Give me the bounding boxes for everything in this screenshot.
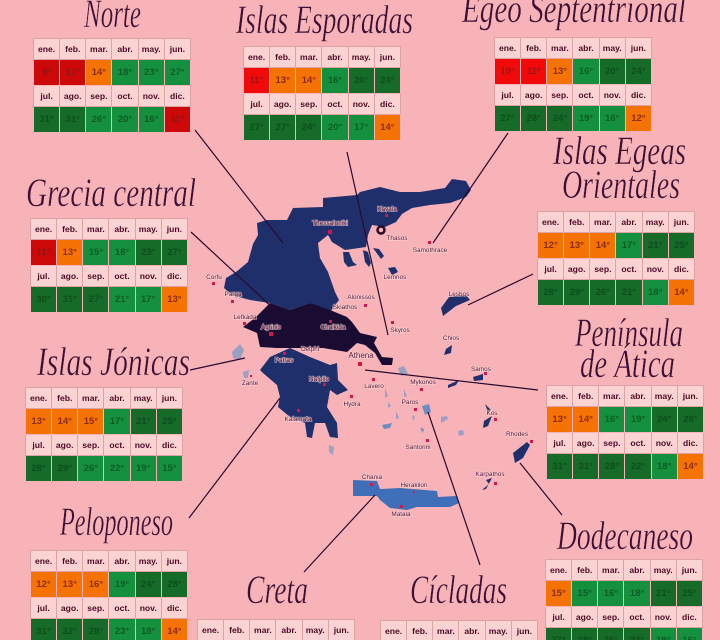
table: Egeo Septentrional bbox=[494, 37, 652, 131]
table: Peloponeso: 24° bbox=[141, 579, 155, 590]
table: Peloponeso: 28° bbox=[89, 626, 103, 637]
table: Islas Egeas Orientales: nov. bbox=[647, 264, 664, 274]
table: Islas Jónicas: 22° bbox=[110, 463, 124, 474]
place labels: Athena bbox=[348, 351, 374, 360]
table: Islas Egeas Orientales: 14° bbox=[674, 287, 689, 298]
table: Egeo Septentrional: 27° bbox=[500, 113, 515, 124]
table: Península de Ática: 14° bbox=[683, 461, 698, 472]
table: Península de Ática: jul. bbox=[553, 438, 566, 448]
table: Egeo Septentrional: 28° bbox=[527, 113, 541, 124]
place labels: Zante bbox=[242, 380, 259, 387]
table: Grecia central: feb. bbox=[62, 224, 77, 234]
table: Islas Jónicas: ene. bbox=[30, 393, 47, 403]
table: Islas Jónicas bbox=[25, 387, 183, 481]
table: Norte: 16° bbox=[144, 114, 158, 125]
place labels: Lemnos bbox=[384, 274, 406, 281]
table: Islas Egeas Orientales: abr. bbox=[621, 217, 637, 227]
table: Grecia central: ago. bbox=[61, 271, 79, 281]
table: Islas Jónicas: 15° bbox=[84, 416, 98, 427]
table: Creta: abr. bbox=[281, 625, 297, 635]
table: Islas Esporadas: 27° bbox=[276, 122, 290, 133]
place labels: Alonissos bbox=[347, 294, 375, 301]
place labels: Delphi bbox=[301, 346, 319, 353]
table: Egeo Septentrional: 20° bbox=[605, 66, 619, 77]
table: Peloponeso: nov. bbox=[140, 603, 157, 613]
table: Cícladas: ene. bbox=[385, 626, 402, 636]
table: Islas Egeas Orientales: 29° bbox=[570, 287, 584, 298]
table: Egeo Septentrional: jul. bbox=[501, 90, 514, 100]
table: Norte: dic. bbox=[170, 91, 185, 101]
region: Creta bbox=[353, 480, 459, 510]
table: Islas Esporadas: dic. bbox=[380, 99, 395, 109]
table: Península de Ática: mar. bbox=[603, 391, 621, 401]
table: Grecia central: jun. bbox=[167, 224, 182, 234]
place labels: Corfu bbox=[206, 274, 222, 281]
table: Grecia central: jul. bbox=[37, 271, 50, 281]
table: Grecia central: dic. bbox=[167, 271, 182, 281]
table: Peloponeso: 28° bbox=[167, 579, 182, 590]
table: Dodecaneso: 15° bbox=[578, 588, 592, 599]
place labels: Nafplio bbox=[309, 376, 329, 383]
table: Península de Ática: may. bbox=[655, 391, 674, 401]
table: Grecia central: mar. bbox=[87, 224, 105, 234]
table: Península de Ática: 22° bbox=[631, 461, 645, 472]
table: Islas Egeas Orientales: 21° bbox=[648, 240, 662, 251]
place labels: Matala bbox=[391, 511, 411, 518]
table: Península de Ática: oct. bbox=[630, 438, 646, 448]
table: Islas Jónicas: 13° bbox=[31, 416, 46, 427]
table: Norte: mar. bbox=[90, 44, 108, 54]
table: Península de Ática: 24° bbox=[657, 414, 671, 425]
table: Islas Jónicas: jun. bbox=[162, 393, 177, 403]
table: Egeo Septentrional: 16° bbox=[579, 66, 593, 77]
table: Egeo Septentrional: oct. bbox=[578, 90, 594, 100]
table: Península de Ática: dic. bbox=[683, 438, 698, 448]
map of Greece bbox=[224, 179, 530, 510]
table: Península de Ática: ene. bbox=[551, 391, 568, 401]
table: Islas Jónicas: 15° bbox=[162, 463, 177, 474]
table: Norte: jul. bbox=[40, 91, 53, 101]
table: Islas Jónicas: 29° bbox=[58, 463, 72, 474]
table: Norte: nov. bbox=[143, 91, 160, 101]
table: Dodecaneso: 18° bbox=[630, 588, 644, 599]
table: Egeo Septentrional: jun. bbox=[631, 43, 646, 53]
region: Peloponeso bbox=[260, 348, 348, 438]
table: Norte: 31° bbox=[66, 114, 80, 125]
table: Península de Ática: 31° bbox=[579, 461, 593, 472]
place labels bbox=[206, 206, 528, 518]
table: Islas Jónicas: 14° bbox=[58, 416, 72, 427]
table: Grecia central: 13° bbox=[63, 247, 77, 258]
table: Creta: mar. bbox=[254, 625, 272, 635]
table: Norte: 31° bbox=[39, 114, 54, 125]
table: Islas Esporadas: 14° bbox=[380, 122, 395, 133]
place labels: Paros bbox=[402, 399, 418, 406]
table: Islas Esporadas: jun. bbox=[380, 52, 395, 62]
table: Creta: may. bbox=[306, 625, 325, 635]
table: Egeo Septentrional: 11° bbox=[527, 66, 541, 77]
table: Dodecaneso: jul. bbox=[552, 612, 565, 622]
table: Egeo Septentrional: 12° bbox=[631, 113, 646, 124]
table: Dodecaneso bbox=[545, 559, 703, 640]
table: Islas Esporadas: 24° bbox=[302, 122, 316, 133]
table: Peloponeso: 12° bbox=[36, 579, 51, 590]
place labels: Lavero bbox=[364, 383, 384, 390]
place labels: Skyros bbox=[390, 327, 410, 334]
table: Egeo Septentrional: nov. bbox=[604, 90, 621, 100]
table: Islas Jónicas: 21° bbox=[136, 416, 150, 427]
table: Islas Egeas Orientales: 25° bbox=[674, 240, 689, 251]
table: Islas Egeas Orientales: sep. bbox=[594, 264, 611, 274]
table: Egeo Septentrional: 13° bbox=[553, 66, 567, 77]
table: Islas Esporadas: may. bbox=[352, 52, 371, 62]
table: Peloponeso: jun. bbox=[167, 556, 182, 566]
place labels: Chalkida bbox=[321, 324, 346, 331]
table: Dodecaneso: abr. bbox=[629, 565, 645, 575]
table: Grecia central: 30° bbox=[36, 294, 51, 305]
table: Península de Ática: sep. bbox=[603, 438, 620, 448]
table: Peloponeso: jul. bbox=[37, 603, 50, 613]
table: Egeo Septentrional: 16° bbox=[605, 113, 619, 124]
table: Peloponeso: 31° bbox=[36, 626, 51, 637]
table: Egeo Septentrional: mar. bbox=[551, 43, 569, 53]
table: Península de Ática: 13° bbox=[552, 414, 567, 425]
table: Norte: feb. bbox=[65, 44, 80, 54]
table: Egeo Septentrional: abr. bbox=[578, 43, 594, 53]
table: Peloponeso: 23° bbox=[115, 626, 129, 637]
table: Norte: 9° bbox=[42, 67, 51, 78]
table: Peloponeso: 14° bbox=[167, 626, 182, 637]
table: Grecia central: 15° bbox=[89, 247, 103, 258]
table: Egeo Septentrional: sep. bbox=[551, 90, 568, 100]
table: Cícladas: feb. bbox=[412, 626, 427, 636]
table: Dodecaneso: sep. bbox=[602, 612, 619, 622]
table: Peloponeso: 19° bbox=[115, 579, 129, 590]
table: Grecia central: 18° bbox=[115, 247, 129, 258]
table: Península de Ática: abr. bbox=[630, 391, 646, 401]
table: Grecia central: 23° bbox=[141, 247, 155, 258]
table: Peloponeso: feb. bbox=[62, 556, 77, 566]
table: Islas Egeas Orientales: mar. bbox=[594, 217, 612, 227]
table: Islas Jónicas: nov. bbox=[135, 440, 152, 450]
table: Península de Ática: 16° bbox=[605, 414, 619, 425]
table: Creta: jun. bbox=[334, 625, 349, 635]
table: Islas Jónicas: ago. bbox=[56, 440, 74, 450]
table: Dodecaneso: ago. bbox=[576, 612, 594, 622]
table: Peloponeso: sep. bbox=[87, 603, 104, 613]
table: Islas Egeas Orientales: 17° bbox=[622, 240, 636, 251]
table: Península de Ática: feb. bbox=[578, 391, 593, 401]
table: Islas Esporadas: oct. bbox=[327, 99, 343, 109]
table: Península de Ática: 28° bbox=[605, 461, 619, 472]
table: Peloponeso: 32° bbox=[63, 626, 77, 637]
table: Norte: oct. bbox=[117, 91, 133, 101]
place labels: Santorini bbox=[405, 444, 431, 451]
place labels: Parga bbox=[224, 291, 242, 298]
table: Peloponeso: ene. bbox=[35, 556, 52, 566]
table: Peloponeso: 16° bbox=[89, 579, 103, 590]
title: de Ática: de Ática bbox=[580, 341, 675, 386]
table: Dodecaneso: mar. bbox=[602, 565, 620, 575]
table: Grecia central: 17° bbox=[141, 294, 155, 305]
table: Peloponeso: dic. bbox=[167, 603, 182, 613]
table: Islas Esporadas: nov. bbox=[353, 99, 370, 109]
title: Peloponeso: Peloponeso bbox=[59, 499, 173, 544]
place markers bbox=[212, 214, 533, 508]
table: Islas Egeas Orientales: dic. bbox=[674, 264, 689, 274]
table: Egeo Septentrional: ago. bbox=[525, 90, 543, 100]
table: Grecia central: ene. bbox=[35, 224, 52, 234]
table: Península de Ática bbox=[546, 385, 704, 479]
table: Península de Ática: 14° bbox=[579, 414, 593, 425]
table: Islas Egeas Orientales: 12° bbox=[543, 240, 558, 251]
Thasos marker ring bbox=[378, 226, 384, 234]
connector lines bbox=[189, 130, 562, 572]
table: Islas Egeas Orientales: 13° bbox=[570, 240, 584, 251]
table: Dodecaneso: 21° bbox=[656, 588, 670, 599]
table: Islas Jónicas: abr. bbox=[109, 393, 125, 403]
table: Peloponeso: may. bbox=[139, 556, 158, 566]
table: Islas Esporadas: 17° bbox=[354, 122, 368, 133]
table: Norte: abr. bbox=[117, 44, 133, 54]
place labels: Agrinio bbox=[261, 324, 281, 331]
table: Norte: ago. bbox=[64, 91, 82, 101]
table: Islas Egeas Orientales: 18° bbox=[648, 287, 662, 298]
table: Norte: 14° bbox=[92, 67, 106, 78]
table: Grecia central: abr. bbox=[114, 224, 130, 234]
table: Norte: 11° bbox=[170, 114, 184, 125]
place labels: Samothrace bbox=[413, 247, 448, 254]
table: Egeo Septentrional: feb. bbox=[526, 43, 541, 53]
table: Egeo Septentrional: ene. bbox=[499, 43, 516, 53]
place labels: Kalamata bbox=[284, 416, 312, 423]
table: Islas Egeas Orientales: oct. bbox=[621, 264, 637, 274]
place labels: Karpathos bbox=[475, 471, 505, 478]
place labels: Kavala bbox=[377, 206, 397, 213]
place labels: Lesbos bbox=[449, 291, 469, 298]
table: Grecia central: sep. bbox=[87, 271, 104, 281]
place labels: Hydra bbox=[343, 401, 361, 408]
table: Islas Egeas Orientales: 14° bbox=[596, 240, 610, 251]
table: Islas Jónicas: 28° bbox=[31, 463, 46, 474]
table: Grecia central: 13° bbox=[167, 294, 182, 305]
table: Grecia central: 31° bbox=[63, 294, 77, 305]
table: Islas Esporadas: 27° bbox=[249, 122, 264, 133]
table: Grecia central: 11° bbox=[37, 247, 50, 258]
table: Dodecaneso: oct. bbox=[629, 612, 645, 622]
table: Islas Jónicas: dic. bbox=[162, 440, 177, 450]
table: Cícladas bbox=[380, 620, 538, 640]
table: Islas Esporadas: 20° bbox=[354, 75, 368, 86]
table: Islas Esporadas: 14° bbox=[302, 75, 316, 86]
table: Islas Jónicas: oct. bbox=[109, 440, 125, 450]
table: Islas Egeas Orientales: 26° bbox=[596, 287, 610, 298]
table: Islas Esporadas: 20° bbox=[328, 122, 342, 133]
table: Peloponeso: 18° bbox=[141, 626, 155, 637]
table: Norte: 18° bbox=[118, 67, 132, 78]
place labels: Samos bbox=[471, 366, 491, 373]
table: Norte: 27° bbox=[170, 67, 185, 78]
table: Cícladas: jun. bbox=[517, 626, 532, 636]
table: Península de Ática: nov. bbox=[656, 438, 673, 448]
table: Islas Egeas Orientales: 21° bbox=[622, 287, 636, 298]
place labels: Thasos bbox=[387, 235, 407, 242]
table: Islas Egeas Orientales: may. bbox=[646, 217, 665, 227]
table: Peloponeso: oct. bbox=[114, 603, 130, 613]
title: Cícladas: Cícladas bbox=[410, 567, 507, 612]
table: Norte: sep. bbox=[90, 91, 107, 101]
table: Cícladas: abr. bbox=[464, 626, 480, 636]
table: Islas Jónicas: mar. bbox=[82, 393, 100, 403]
table: Islas Esporadas: 16° bbox=[328, 75, 342, 86]
table: Peloponeso: mar. bbox=[87, 556, 105, 566]
table: Cícladas: may. bbox=[489, 626, 508, 636]
place labels: Skiathos bbox=[333, 304, 357, 311]
region: Norte bbox=[224, 179, 471, 312]
table: Egeo Septentrional: may. bbox=[603, 43, 622, 53]
table: Egeo Septentrional: 10° bbox=[500, 66, 515, 77]
title: Grecia central: Grecia central bbox=[26, 170, 196, 215]
table: Islas Esporadas: feb. bbox=[275, 52, 290, 62]
place labels: Rhodes bbox=[506, 431, 528, 438]
table: Islas Jónicas: may. bbox=[134, 393, 153, 403]
table: Egeo Septentrional: 19° bbox=[579, 113, 593, 124]
table: Península de Ática: ago. bbox=[577, 438, 595, 448]
table: Dodecaneso: 15° bbox=[551, 588, 566, 599]
table: Norte: jun. bbox=[170, 44, 185, 54]
table: Creta bbox=[197, 619, 355, 640]
table: Peloponeso: 13° bbox=[63, 579, 77, 590]
place labels: Kos bbox=[486, 410, 498, 417]
table: Península de Ática: 28° bbox=[683, 414, 698, 425]
table: Islas Esporadas: ene. bbox=[248, 52, 265, 62]
table: Islas Esporadas: sep. bbox=[300, 99, 317, 109]
table: Islas Egeas Orientales: ago. bbox=[568, 264, 586, 274]
table: Peloponeso: abr. bbox=[114, 556, 130, 566]
table: Islas Egeas Orientales: jul. bbox=[544, 264, 557, 274]
region: Grecia central bbox=[243, 303, 393, 365]
table: Dodecaneso: may. bbox=[654, 565, 673, 575]
table: Islas Egeas Orientales: feb. bbox=[569, 217, 584, 227]
table: Islas Jónicas: 26° bbox=[84, 463, 98, 474]
place labels: Thessaloniki bbox=[312, 220, 348, 227]
place labels: Heraklion bbox=[400, 482, 428, 489]
table: Grecia central: oct. bbox=[114, 271, 130, 281]
table: Islas Esporadas: 11° bbox=[250, 75, 264, 86]
table: Norte: 11° bbox=[66, 67, 80, 78]
table: Islas Jónicas: 25° bbox=[162, 416, 177, 427]
table: Dodecaneso: feb. bbox=[577, 565, 592, 575]
Chalkidiki peninsula bbox=[343, 248, 384, 267]
table: Islas Esporadas bbox=[243, 46, 401, 140]
table: Norte: 20° bbox=[118, 114, 132, 125]
Cyclades and Ionian islands bbox=[232, 344, 464, 455]
table: Islas Jónicas: 19° bbox=[136, 463, 150, 474]
table: Norte: ene. bbox=[38, 44, 55, 54]
table: Islas Jónicas: 17° bbox=[110, 416, 124, 427]
region: Dodecaneso islands bbox=[482, 404, 530, 490]
table: Grecia central: 27° bbox=[89, 294, 103, 305]
table: Creta: feb. bbox=[229, 625, 244, 635]
table: Península de Ática: jun. bbox=[683, 391, 698, 401]
table: Islas Egeas Orientales: 28° bbox=[543, 287, 558, 298]
place labels: Mykonos bbox=[410, 379, 436, 386]
table: Islas Jónicas: sep. bbox=[82, 440, 99, 450]
table: Islas Jónicas: jul. bbox=[32, 440, 45, 450]
table: Islas Esporadas: jul. bbox=[250, 99, 263, 109]
table: Islas Egeas Orientales: jun. bbox=[674, 217, 689, 227]
title: Creta: Creta bbox=[246, 567, 308, 612]
table: Islas Esporadas: 24° bbox=[380, 75, 395, 86]
table: Dodecaneso: jun. bbox=[682, 565, 697, 575]
table: Norte bbox=[33, 38, 191, 132]
title: Islas Jónicas: Islas Jónicas bbox=[36, 339, 190, 384]
table: Dodecaneso: 25° bbox=[682, 588, 697, 599]
table: Islas Esporadas: 13° bbox=[276, 75, 290, 86]
North Aegean islands bbox=[388, 267, 483, 388]
table: Grecia central: may. bbox=[139, 224, 158, 234]
table: Grecia central bbox=[30, 218, 188, 312]
table: Norte: 26° bbox=[92, 114, 106, 125]
table: Creta: ene. bbox=[202, 625, 219, 635]
table: Dodecaneso: ene. bbox=[550, 565, 567, 575]
table: Dodecaneso: nov. bbox=[655, 612, 672, 622]
table: Grecia central: 21° bbox=[115, 294, 129, 305]
table: Península de Ática: 18° bbox=[657, 461, 671, 472]
table: Cícladas: mar. bbox=[437, 626, 455, 636]
table: Egeo Septentrional: dic. bbox=[631, 90, 646, 100]
place labels: Chania bbox=[362, 474, 383, 481]
table: Islas Jónicas: feb. bbox=[57, 393, 72, 403]
table: Península de Ática: 19° bbox=[631, 414, 645, 425]
table: Dodecaneso: 16° bbox=[604, 588, 618, 599]
place labels: Lefkáda bbox=[234, 314, 257, 321]
table: Norte: may. bbox=[142, 44, 161, 54]
table: Peloponeso: ago. bbox=[61, 603, 79, 613]
table: Norte: 23° bbox=[144, 67, 158, 78]
table: Egeo Septentrional: 24° bbox=[553, 113, 567, 124]
table: Península de Ática: 31° bbox=[552, 461, 567, 472]
table: Islas Esporadas: ago. bbox=[274, 99, 292, 109]
table: Islas Egeas Orientales bbox=[537, 211, 695, 305]
table: Grecia central: 27° bbox=[167, 247, 182, 258]
place labels: Patras bbox=[275, 357, 293, 364]
table: Islas Egeas Orientales: ene. bbox=[542, 217, 559, 227]
table: Grecia central: nov. bbox=[140, 271, 157, 281]
table: Egeo Septentrional: 24° bbox=[631, 66, 646, 77]
place labels: Chios bbox=[443, 335, 459, 342]
table: Peloponeso bbox=[30, 550, 188, 640]
table: Islas Esporadas: abr. bbox=[327, 52, 343, 62]
table: Islas Esporadas: mar. bbox=[300, 52, 318, 62]
table: Dodecaneso: dic. bbox=[682, 612, 697, 622]
